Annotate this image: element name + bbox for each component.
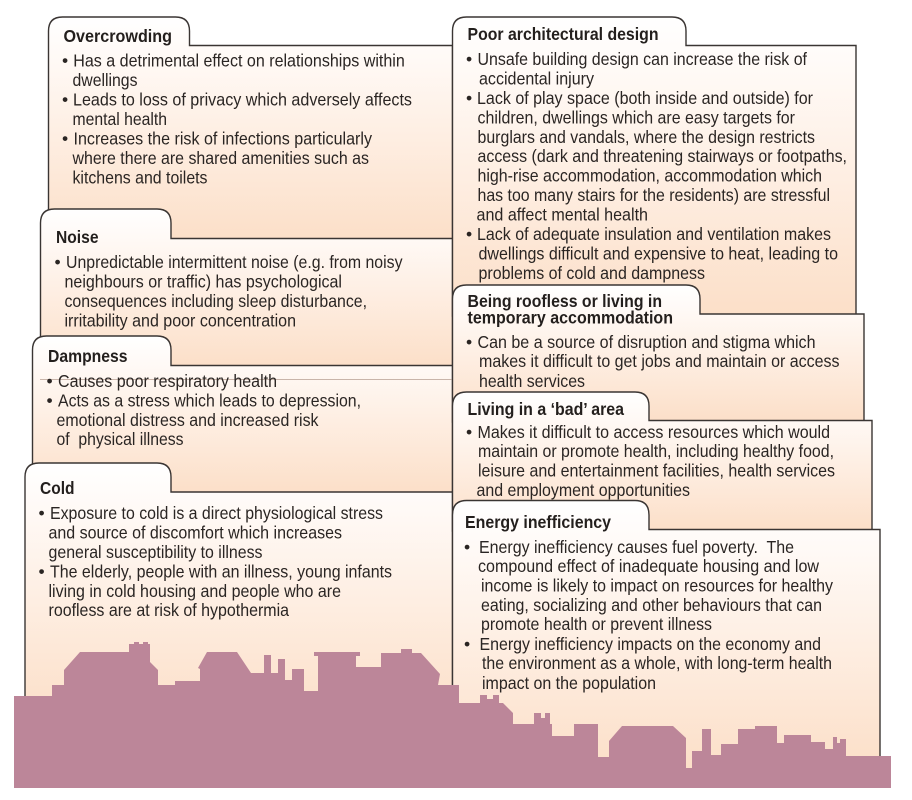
text block: cold bullets: • <box>38 503 45 523</box>
text block: living in a bad area bullets: leisure and entertainment facilities, health services <box>478 460 835 480</box>
text block: energy inefficiency bullets: • <box>464 634 470 654</box>
text block: poor architectural design bullets: • <box>466 49 472 69</box>
heading: energy inefficiency: Energy inefficiency <box>465 512 611 532</box>
text block: living in a bad area bullets: and employment opportunities <box>476 480 690 500</box>
heading: living in a bad area: Living in a ‘bad’ area <box>468 399 624 419</box>
panel: cold <box>25 463 452 720</box>
text block: cold bullets: roofless are at risk of hypothermia <box>48 600 289 620</box>
text block: energy inefficiency bullets: • <box>464 537 470 557</box>
panel: living in a bad area <box>452 392 872 531</box>
text block: overcrowding bullets: • <box>62 50 68 70</box>
text block: dampness bullets: • <box>46 390 53 410</box>
text block: living in a bad area bullets: Makes it difficult to access resources which would <box>478 422 830 442</box>
heading: cold: Cold <box>40 478 74 498</box>
text block: poor architectural design bullets: • <box>466 88 472 108</box>
text block: poor architectural design bullets: problems of cold and dampness <box>478 263 705 283</box>
text block: overcrowding bullets <box>62 50 412 188</box>
text block: being roofless bullets: • <box>466 332 472 352</box>
text block: noise bullets: irritability and poor concentration <box>64 310 296 330</box>
text block: dampness bullets: Acts as a stress which leads to depression, <box>58 390 361 410</box>
text block: poor architectural design bullets: has too many stairs for the residents) are stressful <box>478 185 830 205</box>
text block: overcrowding bullets: mental health <box>72 109 167 129</box>
text block: noise bullets: • <box>54 252 61 272</box>
text block: overcrowding bullets: Has a detrimental effect on relationships within <box>73 50 405 70</box>
text block: cold bullets: and source of discomfort which increases <box>48 522 342 542</box>
text block: dampness bullets: • <box>46 371 53 391</box>
text block: energy inefficiency bullets: Energy inefficiency causes fuel poverty. The <box>479 537 794 557</box>
text block: overcrowding bullets: Increases the risk of infections particularly <box>74 128 372 148</box>
text block: overcrowding bullets: • <box>62 90 68 110</box>
heading: being roofless: temporary accommodation <box>468 308 673 328</box>
heading: being roofless: Being roofless or living in <box>468 291 662 311</box>
text block: noise bullets: consequences including sleep disturbance, <box>64 291 367 311</box>
text block: being roofless bullets: makes it difficult to get jobs and maintain or access <box>479 351 840 371</box>
text block: noise bullets: Unpredictable intermittent noise (e.g. from noisy <box>66 252 403 272</box>
text block: dampness bullets: of physical illness <box>56 429 184 449</box>
text block: being roofless bullets: Can be a source of disruption and stigma which <box>478 332 816 352</box>
text block: poor architectural design bullets: children, dwellings which are easy targets for <box>478 108 795 128</box>
text block: cold bullets: The elderly, people with an illness, young infants <box>50 562 392 582</box>
text block: energy inefficiency bullets: compound effect of inadequate housing and low <box>478 556 819 576</box>
text block: poor architectural design bullets: and affect mental health <box>476 204 648 224</box>
text block: being roofless bullets <box>466 332 840 391</box>
panel: poor architectural design <box>452 17 856 316</box>
text block: dampness bullets: emotional distress and increased risk <box>56 410 319 430</box>
text block: overcrowding bullets: Leads to loss of privacy which adversely affects <box>73 90 412 110</box>
text block: poor architectural design bullets: Unsafe building design can increase the risk of <box>478 49 807 69</box>
text block: poor architectural design bullets <box>466 49 847 283</box>
text block: overcrowding bullets: where there are shared amenities such as <box>72 148 369 168</box>
text block: dampness bullets: Causes poor respiratory health <box>58 371 277 391</box>
panel: noise <box>40 209 452 367</box>
text block: poor architectural design bullets: Lack of play space (both inside and outside) for <box>477 88 813 108</box>
heading: dampness: Dampness <box>48 346 128 366</box>
text block: poor architectural design bullets: high-rise accommodation, accommodation which <box>478 166 822 186</box>
text block: poor architectural design bullets: access (dark and threatening stairways or footpaths, <box>478 146 847 166</box>
text block: poor architectural design bullets: burglars and vandals, where the design restricts <box>478 127 815 147</box>
text block: being roofless bullets: health services <box>479 371 585 391</box>
text block: energy inefficiency bullets: Energy inefficiency impacts on the economy and <box>480 634 821 654</box>
text block: energy inefficiency bullets: impact on the population <box>482 673 656 693</box>
heading: overcrowding: Overcrowding <box>64 26 172 46</box>
text block: dampness bullets <box>46 371 361 449</box>
text block: energy inefficiency bullets: promote health or prevent illness <box>481 614 712 634</box>
text block: overcrowding bullets: dwellings <box>72 70 138 90</box>
panel: dampness <box>32 336 452 494</box>
text block: living in a bad area bullets: maintain or promote health, including healthy food, <box>478 441 834 461</box>
text block: cold bullets: • <box>38 562 45 582</box>
text block: noise bullets: neighbours or traffic) has psychological <box>64 272 342 292</box>
text block: cold bullets <box>38 503 392 620</box>
panel: overcrowding <box>48 17 452 240</box>
text block: poor architectural design bullets: • <box>466 224 472 244</box>
panel: being roofless <box>452 285 864 422</box>
heading: poor architectural design: Poor architectural design <box>468 24 658 44</box>
text block: energy inefficiency bullets <box>464 537 833 693</box>
text block: overcrowding bullets: kitchens and toilets <box>72 168 208 188</box>
text block: energy inefficiency bullets: income is likely to impact on resources for healthy <box>481 576 833 596</box>
text block: living in a bad area bullets: • <box>466 422 472 442</box>
text block: cold bullets: general susceptibility to illness <box>48 542 263 562</box>
text block: poor architectural design bullets: Lack of adequate insulation and ventilation makes <box>477 224 831 244</box>
text block: living in a bad area bullets <box>466 422 835 500</box>
text block: energy inefficiency bullets: eating, socializing and other behaviours that can <box>481 595 822 615</box>
skyline silhouette <box>14 642 891 788</box>
text block: cold bullets: living in cold housing and people who are <box>48 581 341 601</box>
heading: being roofless <box>468 291 673 328</box>
heading: noise: Noise <box>56 227 98 247</box>
text block: poor architectural design bullets: accidental injury <box>479 68 594 88</box>
text block: noise bullets <box>54 252 403 330</box>
panel: energy inefficiency <box>452 500 880 770</box>
text block: cold bullets: Exposure to cold is a direct physiological stress <box>50 503 383 523</box>
text block: energy inefficiency bullets: the environment as a whole, with long-term health <box>482 653 832 673</box>
text block: overcrowding bullets: • <box>62 128 68 148</box>
text block: poor architectural design bullets: dwellings difficult and expensive to heat, leading to <box>478 244 838 264</box>
